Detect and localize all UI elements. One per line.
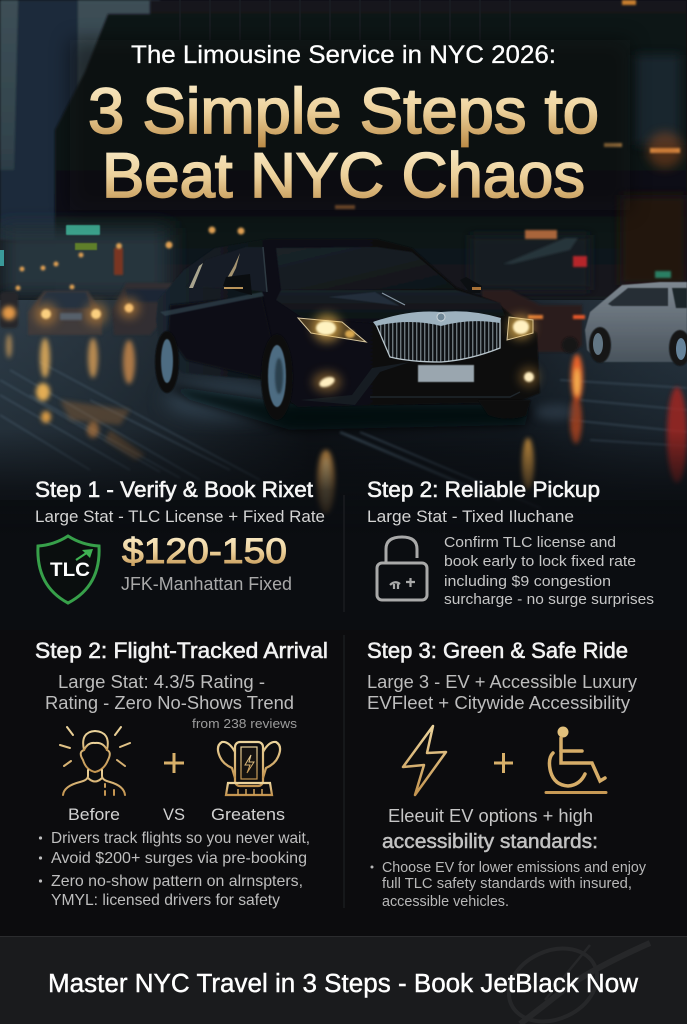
icon: person <box>60 727 130 795</box>
subheading: Large Stat - Tixed Iluchane <box>367 507 574 526</box>
bullet text: accessible vehicles. <box>382 894 509 910</box>
body text: including $9 congestion <box>444 573 611 590</box>
right mirror <box>460 277 482 293</box>
review count: from 238 reviews <box>192 717 297 731</box>
left car <box>28 291 107 335</box>
heading: Step 2: Flight-Tracked Arrival <box>35 638 328 663</box>
road light reflections <box>6 334 687 514</box>
sky and left tower <box>0 0 160 240</box>
car reflection shadow <box>165 385 530 430</box>
distant street lights and signs <box>0 0 683 290</box>
front grille <box>373 311 501 362</box>
footer watermark logo <box>497 935 650 1024</box>
heading: Step 1 - Verify & Book Rixet <box>35 477 314 502</box>
EV options text: Eleeuit EV options + high <box>388 806 593 826</box>
lower bumper <box>300 362 410 405</box>
rear red car <box>482 290 585 353</box>
title line 1: 3 Simple Steps to <box>88 75 599 147</box>
fog lights <box>313 367 539 392</box>
comparison labels <box>68 805 285 824</box>
dark city buildings <box>55 0 687 300</box>
top darkening behind title <box>70 40 630 210</box>
icon: wheelchair <box>546 726 606 792</box>
front right wheel <box>478 400 531 419</box>
body text: surcharge - no surge surprises <box>444 591 654 608</box>
comparison labels: VS <box>163 805 185 824</box>
street haze <box>0 228 170 298</box>
footer text: Master NYC Travel in 3 Steps - Book JetBlack Now <box>48 970 639 998</box>
side windows <box>186 247 267 292</box>
heading: Step 2: Reliable Pickup <box>367 477 600 502</box>
dark fade under photo <box>0 430 687 540</box>
icon: TLC shield: TLC <box>50 560 90 581</box>
second left car <box>112 283 176 335</box>
bullet list: Avoid $200+ surges via pre-booking <box>51 850 307 867</box>
bullet list: Drivers track flights so you never wait, <box>51 830 310 847</box>
right headlight <box>507 315 533 340</box>
side panel reflection <box>168 296 276 378</box>
rating stat: Large Stat: 4.3/5 Rating - <box>58 672 265 692</box>
title line 2: Beat NYC Chaos <box>102 141 585 211</box>
licence plate <box>418 365 474 382</box>
accessibility standards text: accessibility standards: <box>382 831 598 853</box>
rating stat: Rating - Zero No-Shows Trend <box>45 693 294 713</box>
main limousine <box>155 239 540 430</box>
rear left wheel <box>155 331 179 393</box>
icon: lightning bolt <box>403 726 446 795</box>
left mirror <box>223 274 252 295</box>
subheading: Large 3 - EV + Accessible Luxury <box>367 672 637 692</box>
panel: step 1 verify and book <box>35 477 325 603</box>
windshield <box>276 247 456 290</box>
footer call to action <box>0 935 687 1024</box>
bullet list: YMYL: licensed drivers for safety <box>51 892 280 909</box>
bullet list <box>39 830 310 909</box>
body text: book early to lock fixed rate <box>444 553 636 570</box>
subheading <box>367 672 637 713</box>
plus sign <box>164 753 184 773</box>
silver car right <box>585 282 687 366</box>
bullet list: Zero no-show pattern on alrnspters, <box>51 873 303 890</box>
panel: step 3 green and safe ride <box>367 638 647 910</box>
plus sign <box>494 753 513 773</box>
road streaks <box>0 362 687 508</box>
panel: step 2 flight-tracked arrival <box>35 638 328 909</box>
stat value: $120-150 <box>122 532 287 571</box>
heading: Step 3: Green & Safe Ride <box>367 638 628 663</box>
icon: TLC shield <box>38 536 99 603</box>
rating stat <box>45 672 294 713</box>
front left wheel <box>261 334 293 420</box>
subheading: Large Stat - TLC License + Fixed Rate <box>35 507 325 526</box>
title kicker: The Limousine Service in NYC 2026: <box>131 41 556 69</box>
icon: padlock <box>377 537 427 600</box>
road spray <box>165 382 285 418</box>
wet road <box>0 300 687 500</box>
bullet text: full TLC safety standards with insured, <box>382 876 632 892</box>
car body <box>156 239 540 407</box>
body text <box>444 534 654 608</box>
body text: Confirm TLC license and <box>444 534 616 551</box>
comparison labels: Greatens <box>211 805 285 824</box>
bullet text: Choose EV for lower emissions and enjoy <box>382 860 647 876</box>
far left car <box>0 292 18 328</box>
left headlight <box>298 314 366 342</box>
subheading: EVFleet + Citywide Accessibility <box>367 693 630 713</box>
background traffic cars <box>0 282 687 366</box>
stat label: JFK-Manhattan Fixed <box>121 573 292 594</box>
title block <box>88 41 599 211</box>
hood <box>276 290 505 323</box>
bullet text <box>370 860 647 910</box>
panel: step 2 reliable pickup <box>367 477 654 608</box>
comparison labels: Before <box>68 805 120 824</box>
icon: device trophy <box>218 742 280 795</box>
